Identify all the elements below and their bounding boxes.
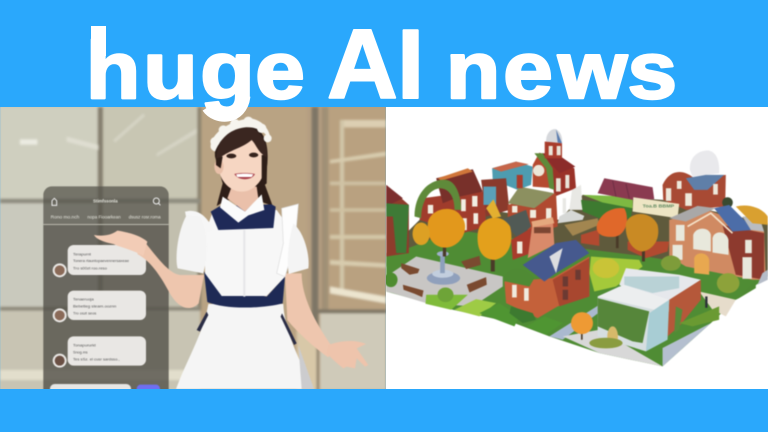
panel: right white background [386,107,768,389]
statue monument [558,185,584,223]
panel header text: Rono mo.nch [51,215,80,220]
office background [0,100,386,400]
far left building [386,185,409,256]
central lawn [589,256,643,291]
grey-roof house [501,210,531,260]
large main hall [669,205,768,280]
neck [227,187,258,212]
right hand [327,341,368,368]
side hair [216,155,267,187]
send button [137,385,160,398]
bottom blue band [0,389,768,432]
lawn strips [426,295,468,310]
chat bubble 2: Tro oszt seos [73,310,96,315]
dress bodice [205,210,293,296]
brick planters [581,229,599,246]
ruffled headband [210,117,272,152]
skirt apron [176,304,314,389]
right arm [285,273,333,357]
panel header text [51,199,161,220]
input field [50,384,131,397]
bangs [216,127,267,158]
navy collar [211,204,276,230]
maid figure [94,117,368,389]
chat bubble 3: Tes sSz. el cusr sardsso., [73,356,120,361]
chat bubble 1: Tro s00zt roo.reso [73,265,108,270]
panel header text: nopa Fiooarkean [87,215,121,220]
left hand [94,231,147,256]
teal building [481,162,533,217]
ground [386,230,768,366]
sign board: Toa.B BBMP [643,204,674,209]
chat bubble 1: Tonera rtauntopaevennersaxeae [73,258,130,263]
white collar [220,194,264,223]
left arm [137,239,204,308]
face [218,132,266,192]
chat bubble 3 [53,336,146,368]
shrubs and small plantings [384,255,768,348]
chat bubble 2: Bebetleg steam.ooznn [73,304,116,309]
chat bubble 2: Tenaeruoja [73,297,94,302]
panel header text: dsusz rosr.roma [129,215,161,220]
gabled green-roof building [508,175,558,233]
hedge and flower beds [581,200,633,218]
illustration: isometric campus [384,129,768,366]
chat bubble 3: Tonapururkt [73,343,97,348]
brick hall with ivy arch [415,168,486,233]
title: news [446,26,677,116]
square tower [528,217,554,258]
title [86,9,677,119]
translucent chat panel [43,186,169,400]
road [549,305,603,340]
purple roof hall [598,178,654,200]
observatory building [663,151,733,210]
hair back [215,124,273,206]
glass green-ivy building [598,268,701,351]
chat bubble 1: Terapurnt [73,251,92,256]
sign board [633,197,679,218]
chat bubble 2 [53,291,146,322]
clock tower building [533,129,576,197]
panel header text: Stimfssonla [93,199,118,204]
chat bubble 1 [53,245,146,277]
icon: search [153,198,160,205]
pavement plaza [386,256,503,306]
benches [401,256,487,297]
title: huge [86,26,305,116]
title: AI [327,9,424,119]
hero brick house with blue roof [504,240,589,323]
chat bubble 3: Snog.ms [73,349,88,354]
sleeves [177,215,207,273]
photo: maid presenting chat interface [0,100,386,400]
navy waist [204,272,285,308]
campus underlayer [386,195,768,276]
top blue band [0,0,768,107]
eyes [226,154,236,158]
fountain [427,251,460,285]
mouth [234,173,255,179]
autumn trees [413,199,658,340]
icon: home [52,198,57,205]
